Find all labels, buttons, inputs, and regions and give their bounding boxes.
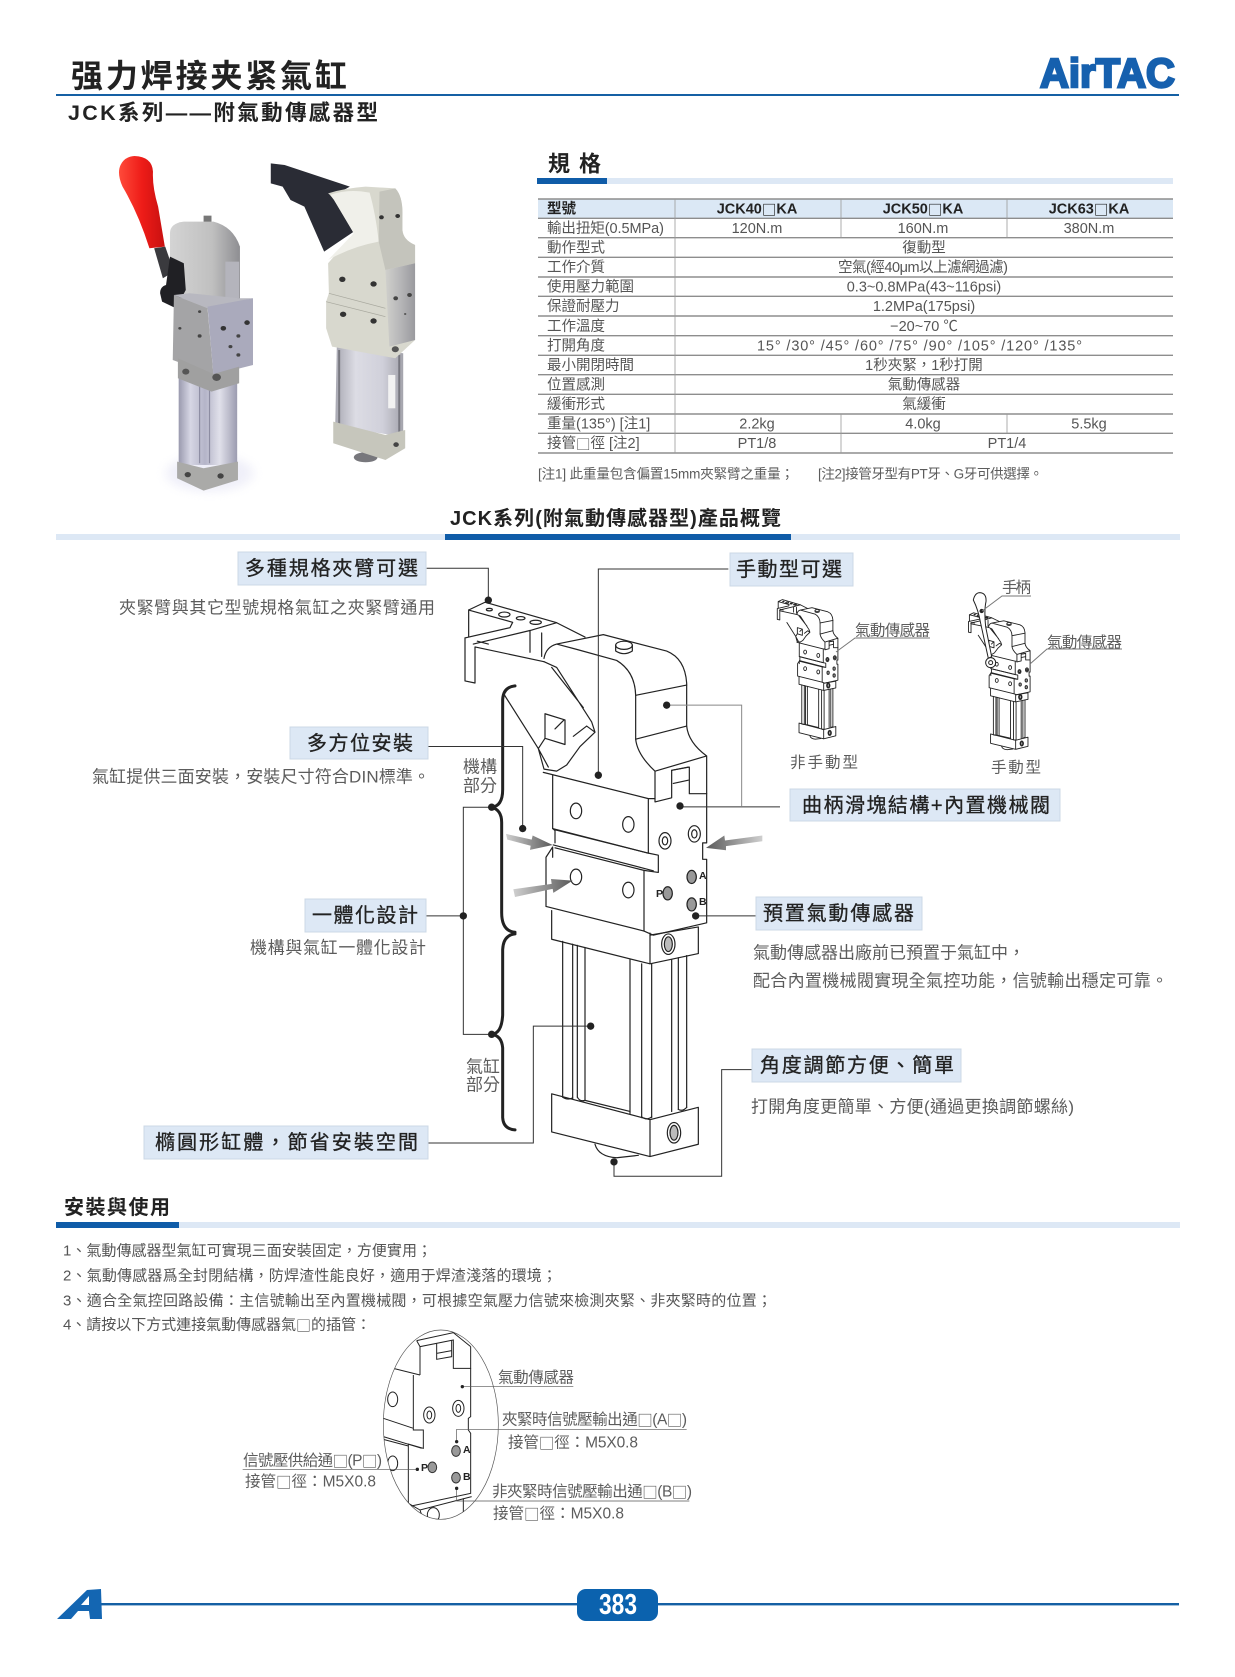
label: cylinder part: 氣缸 bbox=[466, 1056, 500, 1076]
table: specs: 接管□徑 [注2] bbox=[547, 434, 640, 454]
table: specs: 工作溫度 bbox=[547, 318, 605, 335]
table: specs: 380N.m bbox=[1064, 221, 1114, 237]
table: specs: 5.5kg bbox=[1071, 417, 1107, 433]
table footnotes: [注2]接管牙型有PT牙、G牙可供選擇。 bbox=[818, 466, 1043, 482]
label: port A: 夾緊時信號壓輸出通□(A□) bbox=[502, 1409, 687, 1431]
label: sensor: 氣動傳感器 bbox=[498, 1368, 574, 1386]
callout: manual option: 手動型可選 bbox=[736, 558, 842, 581]
sensor label bbox=[836, 620, 930, 652]
sensor label: 氣動傳感器 bbox=[855, 620, 930, 640]
label: port B bbox=[492, 1481, 692, 1525]
table: specs: 1秒夾緊，1秒打開 bbox=[865, 357, 983, 374]
port label B: B bbox=[463, 1471, 471, 1483]
callout: preset sensor: 預置氣動傳感器 bbox=[763, 902, 914, 925]
table: specs: 動作型式 bbox=[547, 240, 605, 256]
caption: 手動型 bbox=[991, 758, 1041, 776]
logo: AirTAC: AirTAC bbox=[1040, 50, 1175, 96]
table: specs: 1.2MPa(175psi) bbox=[873, 299, 975, 315]
heading: specs: 規格 bbox=[548, 152, 601, 176]
leader dots bbox=[460, 596, 699, 1166]
table: specs: 重量(135°) [注1] bbox=[547, 416, 650, 433]
handle bbox=[973, 593, 996, 668]
photo: clamp with black arm bbox=[271, 163, 415, 462]
callout: angle adjustment bbox=[751, 1049, 1074, 1116]
table: specs: 0.3~0.8MPa(43~116psi) bbox=[847, 280, 1001, 296]
port label A: A bbox=[699, 870, 707, 882]
label: port P: 接管□徑：M5X0.8 bbox=[245, 1471, 376, 1493]
callout: integrated design: 機構與氣缸一體化設計 bbox=[250, 938, 426, 958]
sensor label: 氣動傳感器 bbox=[1047, 632, 1122, 652]
handle label bbox=[982, 578, 1031, 611]
title: 强力焊接夹紧氣缸 bbox=[71, 58, 347, 94]
callout: arm options bbox=[119, 552, 435, 618]
table: specs: JCK63□KA bbox=[1049, 199, 1130, 220]
label: port A bbox=[502, 1409, 687, 1454]
detail ellipse bbox=[383, 1330, 498, 1519]
table: specs: PT1/8 bbox=[738, 436, 776, 452]
callout: integrated design bbox=[250, 899, 426, 958]
label: mechanism part: 機構 bbox=[463, 758, 497, 776]
text: usage notes: 3、適合全氣控回路設備：主信號輸出至內置機械閥，可根據空氣壓力信號來檢測夾緊、非夾緊時的位置； bbox=[63, 1292, 772, 1310]
subtitle: JCK系列——附氣動傳感器型 bbox=[68, 100, 378, 125]
diagram: main cylinder bbox=[425, 568, 780, 1176]
label: port B: 非夾緊時信號壓輸出通□(B□) bbox=[492, 1481, 692, 1503]
header rule bbox=[56, 94, 1179, 96]
callout: integrated design: 一體化設計 bbox=[312, 904, 418, 927]
table: specs: 位置感測 bbox=[547, 376, 605, 394]
label: port P: 信號壓供給通□(P□) bbox=[243, 1450, 382, 1472]
page number: 383 bbox=[599, 1589, 637, 1621]
label: mechanism part: 部分 bbox=[463, 776, 497, 796]
arrows bbox=[506, 834, 762, 897]
callout: arm options: 夾緊臂與其它型號規格氣缸之夾緊臂通用 bbox=[119, 598, 435, 618]
port label A: A bbox=[463, 1444, 471, 1456]
table: specs: 氣動傳感器 bbox=[888, 376, 960, 394]
product photos bbox=[119, 156, 415, 492]
table: specs: 型號 bbox=[547, 200, 576, 218]
table: specs: 工作介質 bbox=[547, 258, 605, 276]
callout: preset sensor: 氣動傳感器出廠前已預置于氣缸中， bbox=[753, 942, 1025, 962]
detail linework bbox=[383, 1333, 472, 1522]
callout: manual option bbox=[730, 553, 853, 586]
text: usage notes: 1、氣動傳感器型氣缸可實現三面安裝固定，方便實用； bbox=[63, 1242, 432, 1260]
panel: specifications bbox=[537, 152, 1173, 482]
table: specs bbox=[538, 199, 1173, 454]
heading: installation: 安裝與使用 bbox=[64, 1195, 170, 1219]
sensor label bbox=[1030, 632, 1122, 664]
table: specs: 2.2kg bbox=[739, 417, 775, 433]
detail dots bbox=[416, 1385, 464, 1490]
diagram: port detail bbox=[243, 1330, 692, 1525]
table: specs: 保證耐壓力 bbox=[547, 298, 620, 315]
table: specs: 15° /30° /45° /60° /75° /90° /105° /120° /135° bbox=[757, 338, 1082, 354]
table footnotes: [注1] 此重量包含偏置15mm夾緊臂之重量； bbox=[538, 466, 794, 482]
table: specs: 120N.m bbox=[732, 221, 782, 237]
diagram: non-manual type bbox=[777, 600, 930, 772]
callout: mounting bbox=[92, 727, 430, 786]
leader lines bbox=[425, 568, 780, 1176]
table: specs: 緩衝形式 bbox=[547, 396, 605, 413]
detail leaders bbox=[243, 1387, 689, 1501]
table: specs: 輸出扭矩(0.5MPa) bbox=[547, 220, 664, 237]
port label B: B bbox=[699, 896, 707, 908]
heading bar bbox=[56, 1222, 1180, 1228]
table: specs: −20~70 ℃ bbox=[890, 319, 958, 335]
table: specs: 4.0kg bbox=[905, 417, 941, 433]
table: specs: 氣緩衝 bbox=[902, 396, 946, 413]
callout: preset sensor: 配合內置機械閥實現全氣控功能，信號輸出穩定可靠。 bbox=[753, 972, 1168, 990]
table: specs: 160N.m bbox=[898, 221, 948, 237]
table: specs: 使用壓力範圍 bbox=[547, 278, 634, 296]
table: specs: 復動型 bbox=[902, 238, 946, 256]
label: port B: 接管□徑：M5X0.8 bbox=[493, 1503, 624, 1525]
footer rule bbox=[100, 1603, 1179, 1605]
photo: manual clamp with red handle bbox=[119, 156, 253, 492]
port label P: P bbox=[421, 1462, 428, 1474]
callout: arm options: 多種規格夾臂可選 bbox=[245, 557, 418, 580]
callout: angle adjustment: 角度調節方便、簡單 bbox=[760, 1054, 954, 1077]
text: usage notes bbox=[63, 1242, 772, 1336]
heading: product overview: JCK系列(附氣動傳感器型)產品概覽 bbox=[450, 506, 781, 530]
page number bbox=[577, 1589, 658, 1621]
callout: oval body: 橢圓形缸體，節省安裝空間 bbox=[155, 1131, 418, 1154]
callout: mounting: 多方位安裝 bbox=[307, 732, 413, 755]
table: specs: 最小開閉時間 bbox=[547, 357, 634, 374]
callout: crank slider bbox=[790, 789, 1060, 821]
table: specs: 打開角度 bbox=[547, 338, 605, 354]
callout: oval body bbox=[144, 1126, 428, 1159]
text: usage notes: 4、請按以下方式連接氣動傳感器氣□的插管： bbox=[63, 1314, 371, 1336]
callout: crank slider: 曲柄滑塊結構+內置機械閥 bbox=[802, 794, 1050, 817]
label: port A: 接管□徑：M5X0.8 bbox=[508, 1432, 638, 1454]
braces bbox=[492, 686, 515, 1130]
heading bar bbox=[537, 178, 1173, 184]
table: specs: PT1/4 bbox=[988, 436, 1026, 452]
label: port P bbox=[243, 1450, 382, 1493]
caption: 非手動型 bbox=[790, 754, 858, 772]
heading bar bbox=[56, 534, 1180, 540]
table: specs: 空氣(經40μm以上濾網過濾) bbox=[838, 259, 1008, 276]
callout: preset sensor bbox=[753, 897, 1168, 990]
table: specs: JCK50□KA bbox=[883, 199, 964, 220]
table: specs: JCK40□KA bbox=[717, 199, 798, 220]
port label P: P bbox=[656, 888, 663, 900]
label: cylinder part bbox=[466, 1056, 500, 1094]
footer logo mark bbox=[57, 1589, 102, 1619]
callout: angle adjustment: 打開角度更簡單、方便(通過更換調節螺絲) bbox=[751, 1096, 1074, 1116]
handle label: 手柄 bbox=[1002, 578, 1031, 596]
label: cylinder part: 部分 bbox=[466, 1076, 500, 1094]
table footnotes bbox=[538, 466, 1043, 482]
diagram: manual type bbox=[968, 578, 1122, 776]
text: usage notes: 2、氣動傳感器爲全封閉結構，防焊渣性能良好，適用于焊渣淺落的環境； bbox=[63, 1266, 557, 1284]
callout: mounting: 氣缸提供三面安裝，安裝尺寸符合DIN標準。 bbox=[92, 766, 430, 786]
label: mechanism part bbox=[463, 758, 497, 796]
